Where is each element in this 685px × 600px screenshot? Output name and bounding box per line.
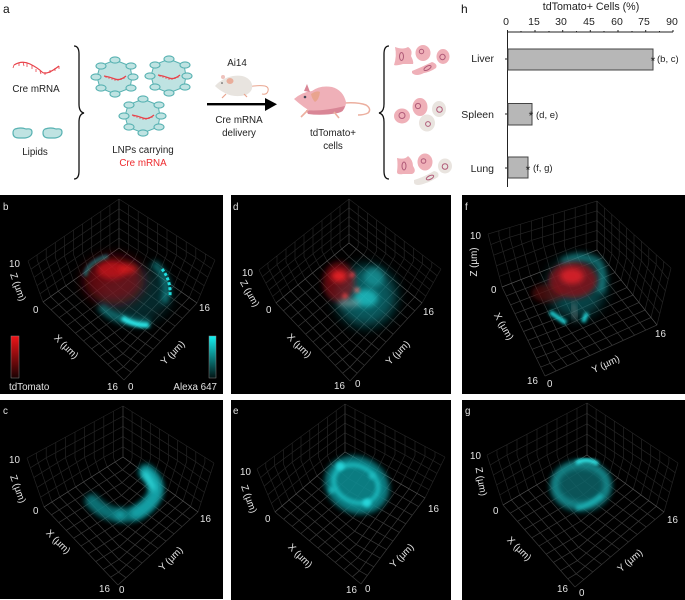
labels: 10: [470, 231, 481, 242]
labels: 16: [334, 381, 345, 392]
labels: 10: [242, 268, 253, 279]
labels: 0: [33, 506, 39, 517]
labels: 0: [579, 588, 585, 599]
cell volume: [315, 446, 399, 524]
colour bar: tdTomato: [11, 336, 19, 378]
labels: 16: [423, 307, 434, 318]
label: Cre mRNA delivery: delivery: [222, 128, 256, 139]
labels: tdTomato: [9, 382, 50, 393]
labels: [3, 406, 211, 596]
labels: 10: [240, 467, 251, 478]
labels: [233, 406, 439, 596]
bar annotations: [533, 54, 679, 174]
left brace: [74, 46, 84, 179]
3D grid: [27, 406, 214, 585]
x axis tick labels: 75: [638, 16, 650, 28]
bar: Spleen: [508, 104, 532, 125]
label: Ai14: Ai14: [227, 58, 247, 69]
cell volume: [92, 471, 157, 520]
labels: e: [233, 406, 239, 417]
cell volume: [84, 256, 171, 325]
right brace: [379, 46, 389, 179]
labels: Y (µm): [157, 545, 186, 574]
labels: X (µm): [504, 535, 533, 564]
category labels: Lung: [471, 163, 494, 175]
labels: Z (µm): [238, 484, 258, 515]
cells row 3: [397, 154, 452, 185]
colour bar: Alexa 647: [209, 336, 216, 378]
axes: [505, 30, 673, 187]
x axis tick labels: 0: [503, 16, 509, 28]
panel h: bar chart: [461, 1, 679, 187]
labels: Z (µm): [7, 474, 27, 505]
cells row 2: [394, 98, 446, 132]
3D grid: [485, 193, 671, 376]
label: tdTomato+ cells: [310, 128, 356, 152]
panel d: spleen tdTomato and Alexa 647: [231, 195, 451, 394]
labels: 0: [365, 584, 371, 595]
labels: 16: [428, 504, 439, 515]
bar annotations: (f, g): [533, 163, 553, 174]
labels: Alexa 647: [173, 382, 217, 393]
labels: Z (µm): [473, 466, 488, 497]
label: tdTomato+ cells: tdTomato+: [310, 128, 356, 139]
label: Cre mRNA delivery: [215, 115, 263, 139]
labels: Y (µm): [159, 339, 188, 368]
panel f: lung tdTomato and Alexa 647: [462, 193, 685, 394]
x axis tick labels: 90: [666, 16, 678, 28]
labels: Y (µm): [590, 354, 622, 376]
labels: g: [465, 406, 470, 417]
bar: Liver: [508, 49, 653, 70]
icon: LNP particles carrying mRNA: [91, 56, 192, 136]
labels: 16: [557, 584, 568, 595]
labels: [233, 202, 434, 392]
3D grid: [28, 199, 215, 380]
labels: d: [233, 202, 238, 213]
axis title: tdTomato+ Cells (%): [543, 1, 639, 13]
label: tdTomato+ cells: cells: [323, 141, 343, 152]
labels: Y (µm): [388, 542, 417, 571]
labels: 10: [9, 259, 20, 270]
labels: 16: [99, 584, 110, 595]
label: LNPs carrying Cre mRNA: LNPs carrying: [112, 145, 174, 156]
category labels: Spleen: [461, 109, 494, 121]
label: Cre mRNA: Cre mRNA: [12, 84, 60, 95]
label: Cre mRNA delivery: Cre mRNA: [215, 115, 263, 126]
cell volume: [550, 460, 612, 512]
labels: 10: [470, 451, 481, 462]
labels: b: [3, 202, 9, 213]
labels: Z (µm): [237, 278, 261, 309]
labels: 10: [9, 455, 20, 466]
label: h: h: [461, 2, 468, 16]
labels: 16: [107, 382, 118, 393]
x axis tick labels: 30: [555, 16, 567, 28]
labels: 0: [491, 285, 497, 296]
labels: 0: [493, 506, 499, 517]
labels: 0: [355, 379, 361, 390]
bar annotations: (d, e): [536, 110, 558, 121]
labels: 0: [547, 379, 553, 390]
labels: X (µm): [51, 333, 80, 362]
bar: Lung: [508, 157, 528, 178]
labels: X (µm): [285, 542, 314, 571]
cells row 1: [394, 45, 450, 75]
panel e: spleen Alexa 647: [231, 400, 451, 600]
labels: 16: [346, 585, 357, 596]
labels: 16: [527, 376, 538, 387]
labels: 16: [200, 514, 211, 525]
labels: Y (µm): [616, 547, 645, 575]
labels: Y (µm): [384, 339, 413, 368]
labels: f: [465, 202, 468, 213]
labels: 16: [667, 515, 678, 526]
labels: c: [3, 406, 8, 417]
panel g: lung Alexa 647: [462, 400, 685, 600]
labels: 0: [128, 382, 134, 393]
panel b: liver tdTomato and Alexa 647: [0, 195, 223, 394]
icon: pink tdTomato mouse: [294, 84, 370, 118]
x axis tick labels: 15: [528, 16, 540, 28]
cell volume: [532, 257, 605, 323]
labels: X (µm): [491, 311, 515, 342]
3D grid: [487, 403, 678, 587]
labels: Z (µm): [469, 247, 480, 277]
icon: lipids: [13, 128, 62, 138]
labels: X (µm): [284, 332, 313, 361]
panel c: liver Alexa 647: [0, 400, 223, 599]
labels: [465, 202, 666, 390]
labels: 0: [119, 585, 125, 596]
data markers: *: [651, 54, 656, 68]
label: LNPs carrying Cre mRNA: [112, 145, 174, 169]
label: LNPs carrying Cre mRNA: Cre mRNA: [119, 158, 167, 169]
icon: cell clusters: [394, 45, 452, 185]
labels: 0: [33, 305, 39, 316]
labels: [465, 406, 678, 599]
labels: X (µm): [43, 528, 72, 557]
labels: 0: [266, 305, 272, 316]
category labels: Liver: [471, 53, 494, 65]
panel label: a: a: [3, 2, 10, 16]
x axis tick labels: 60: [611, 16, 623, 28]
labels: [3, 202, 217, 393]
x axis tick labels: 45: [583, 16, 595, 28]
category labels: [461, 53, 494, 175]
labels: Z (µm): [7, 272, 27, 303]
data markers: [526, 54, 656, 177]
labels: 0: [265, 514, 271, 525]
3D grid: [259, 199, 441, 381]
data markers: *: [529, 109, 534, 123]
labels: 16: [655, 329, 666, 340]
x axis tick labels: [503, 16, 678, 28]
labels: 16: [199, 303, 210, 314]
bar annotations: (b, c): [657, 54, 679, 65]
icon: Cre mRNA strand: [13, 62, 59, 75]
arrow: Cre mRNA delivery: [207, 98, 277, 111]
3D grid: [257, 404, 445, 584]
label: Lipids: Lipids: [22, 147, 48, 158]
cell volume: [323, 262, 396, 326]
data markers: *: [526, 163, 531, 177]
icon: white mouse: [215, 75, 268, 98]
